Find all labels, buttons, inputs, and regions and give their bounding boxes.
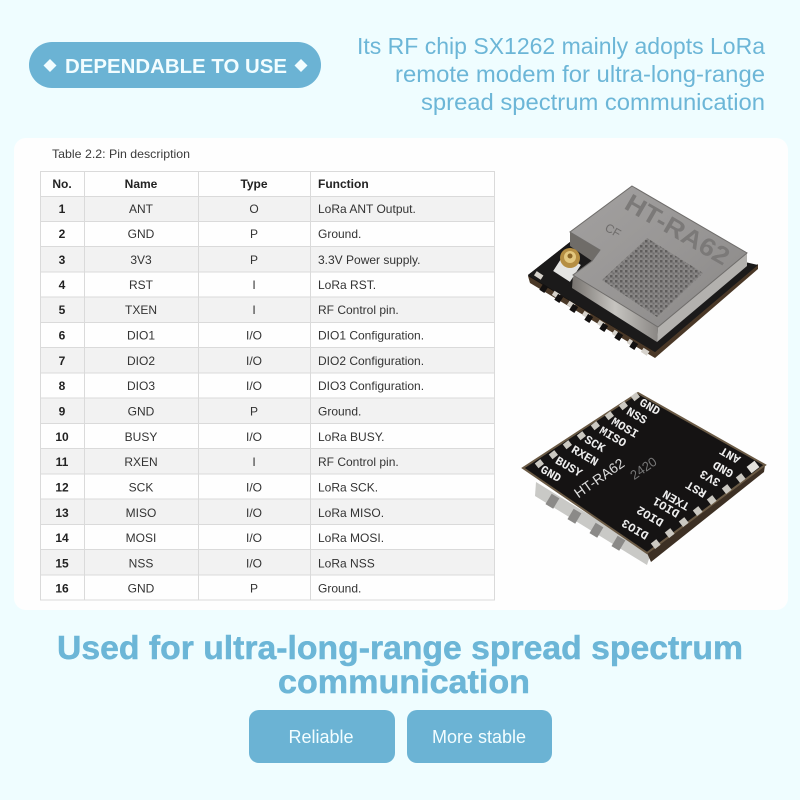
intro text: spread spectrum communication [421, 89, 765, 115]
table: pin description: 7 [59, 354, 66, 368]
QR code engraving [602, 238, 703, 317]
photo: module top with metal shield: HT-RA62 [620, 189, 734, 271]
photo: module underside with pin labels: MISO [597, 424, 628, 451]
table: pin description: I/O [246, 379, 262, 393]
table: pin description: DIO2 Configuration. [318, 354, 424, 368]
table: pin description: I/O [246, 480, 262, 494]
photo: module underside with pin labels: ANT [718, 443, 743, 466]
photo: module underside with pin labels: GND [637, 396, 662, 419]
table: pin description: 9 [59, 404, 66, 418]
table: pin description: 16 [55, 582, 69, 596]
table: pin description: GND [128, 404, 155, 418]
table: pin description: LoRa MOSI. [318, 531, 384, 545]
button: more stable [407, 710, 552, 763]
table: pin description: DIO2 [127, 354, 155, 368]
table: pin description: LoRa MISO. [318, 506, 384, 520]
photo: module underside with pin labels: TXEN [661, 486, 692, 513]
table: pin description: MOSI [126, 531, 156, 545]
table: pin description: I/O [246, 531, 262, 545]
intro text: remote modem for ultra-long-range [395, 61, 765, 87]
table: pin description: 3 [59, 253, 66, 267]
heading: ultra-long-range communication: communication [278, 663, 530, 700]
photo: module underside with pin labels: SCK [582, 433, 608, 456]
table: pin description: MISO [126, 506, 156, 520]
photo: module underside with pin labels: RST [684, 477, 709, 500]
table: pin description: P [250, 404, 258, 418]
table: pin description: SCK [129, 480, 153, 494]
photo: module top with metal shield [528, 186, 758, 358]
table: pin description: DIO3 [127, 379, 155, 393]
photo: module top with metal shield: CF [602, 220, 623, 241]
table: pin description: P [250, 253, 258, 267]
table: pin description: LoRa ANT Output. [318, 202, 416, 216]
photo: module underside with pin labels: DIO3 [620, 515, 651, 542]
table: pin description: RXEN [124, 455, 158, 469]
table: pin description: 3.3V Power supply. [318, 253, 420, 267]
table: pin description: 3V3 [130, 253, 152, 267]
table: pin description: 14 [55, 531, 69, 545]
intro text [357, 33, 765, 115]
icon: antenna connector [553, 248, 581, 282]
table: pin description: I [252, 455, 256, 469]
table: pin description: 1 [59, 202, 66, 216]
button: reliable [249, 710, 395, 763]
table: pin description: I/O [246, 328, 262, 342]
photo: module underside with pin labels: 3V3 [698, 466, 723, 489]
table: pin description: 4 [59, 278, 66, 292]
table: pin description: 15 [55, 556, 69, 570]
photo: module underside with pin labels: 2420 [627, 454, 660, 483]
intro text: Its RF chip SX1262 mainly adopts LoRa [357, 33, 765, 59]
table: pin description: BUSY [125, 430, 157, 444]
photo: module underside with pin labels: DIO1 [651, 493, 682, 520]
button: more stable: More stable [432, 727, 526, 747]
photo: module underside with pin labels: GND [711, 457, 736, 480]
table: pin description: RST [129, 278, 154, 292]
table: pin description: NSS [129, 556, 153, 570]
badge: dependable to use [29, 42, 321, 88]
table: pin description: Name [125, 177, 158, 191]
table: pin description: GND [128, 227, 155, 241]
table: pin description: Ground. [318, 404, 361, 418]
table: pin description: I [252, 278, 256, 292]
badge: dependable to use: DEPENDABLE TO USE [65, 55, 287, 78]
table: pin description: I/O [246, 354, 262, 368]
photo: module underside with pin labels: MOSI [609, 415, 640, 442]
table: pin description: 5 [59, 303, 66, 317]
table: pin description: 13 [55, 506, 69, 520]
table: pin description: RF Control pin. [318, 303, 399, 317]
table: pin description: LoRa RST. [318, 278, 376, 292]
photo: module underside with pin labels: GND [538, 463, 563, 486]
table: pin description: DIO1 Configuration. [318, 328, 424, 342]
table: pin description: ANT [129, 202, 154, 216]
photo: module underside with pin labels: BUSY [553, 454, 585, 481]
heading: ultra-long-range communication [57, 629, 743, 700]
button: reliable: Reliable [288, 727, 354, 747]
table: pin description: I [252, 303, 256, 317]
table: pin description: I/O [246, 506, 262, 520]
table: pin description: RF Control pin. [318, 455, 399, 469]
photo: module underside with pin labels: RXEN [569, 443, 600, 470]
table: pin description: 10 [55, 430, 69, 444]
table: pin description: LoRa NSS [318, 556, 375, 570]
table: pin description: 11 [56, 455, 69, 469]
table: pin description: LoRa SCK. [318, 480, 378, 494]
table: pin description: 6 [59, 328, 66, 342]
table: pin description: P [250, 582, 258, 596]
panel: pin description and product photos [14, 138, 788, 610]
heading: ultra-long-range communication: Used for ultra-long-range spread spectrum [57, 629, 743, 666]
table: pin description: TXEN [125, 303, 157, 317]
table: pin description: DIO1 [127, 328, 155, 342]
table: pin description: DIO3 Configuration. [318, 379, 424, 393]
table: pin description: No. [52, 177, 72, 191]
table: pin description: 2 [59, 227, 66, 241]
table: pin description: GND [128, 582, 155, 596]
photo: module underside with pin labels: DIO2 [635, 502, 666, 529]
photo: module underside with pin labels [523, 392, 765, 565]
table: pin description: Ground. [318, 582, 361, 596]
table: pin description [40, 171, 495, 600]
table: pin description: 12 [55, 480, 69, 494]
table: pin description: Ground. [318, 227, 361, 241]
table: pin description: I/O [246, 430, 262, 444]
table: pin description: Type [240, 177, 268, 191]
table: pin description: 8 [59, 379, 66, 393]
photo: module underside with pin labels: HT-RA62 [571, 455, 627, 501]
photo: module underside with pin labels: NSS [624, 405, 649, 428]
table: pin description: LoRa BUSY. [318, 430, 384, 444]
table: pin description: O [249, 202, 259, 216]
table: pin description: I/O [246, 556, 262, 570]
table: pin description: Function [318, 177, 369, 191]
table caption: Table 2.2: Pin description [52, 147, 190, 161]
table: pin description: P [250, 227, 258, 241]
